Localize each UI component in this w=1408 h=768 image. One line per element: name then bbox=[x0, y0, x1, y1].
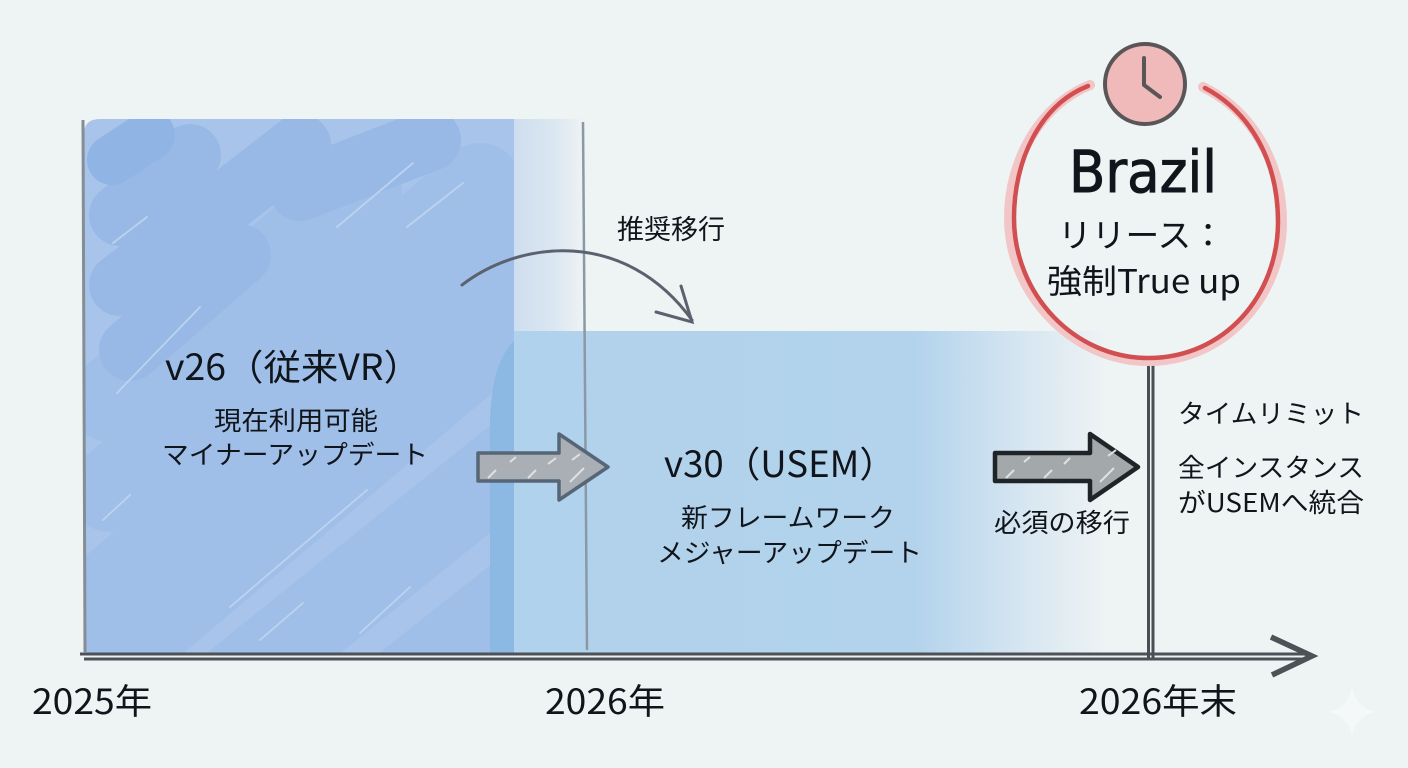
timeline axis arrow bbox=[80, 637, 1312, 675]
v30 description: メジャーアップデート bbox=[657, 533, 922, 570]
time limit note: タイムリミット bbox=[1178, 394, 1364, 431]
Brazil release ring bbox=[1009, 85, 1282, 361]
panel: v30 block bbox=[490, 331, 1105, 655]
axis label: 2026: 2026年 bbox=[545, 674, 665, 725]
v30 description bbox=[657, 498, 922, 570]
v30 title: v30（USEM） bbox=[664, 436, 896, 488]
v26 description: 現在利用可能 bbox=[214, 401, 378, 438]
v30 description: 新フレームワーク bbox=[681, 498, 895, 535]
Brazil description bbox=[1047, 209, 1241, 303]
icon: sparkle bbox=[1328, 687, 1376, 736]
panel: v26 block bbox=[84, 119, 584, 690]
Brazil description: リリース： bbox=[1058, 209, 1225, 257]
Brazil description: 強制True up bbox=[1047, 255, 1241, 303]
time limit note: 全インスタンス bbox=[1178, 448, 1364, 485]
v26 description: マイナーアップデート bbox=[162, 435, 428, 472]
block arrow: mandatory migration bbox=[995, 434, 1138, 500]
Brazil heading: Brazil bbox=[1069, 138, 1217, 206]
left boundary line bbox=[83, 120, 85, 652]
time limit note bbox=[1178, 394, 1364, 520]
label: recommended migration: 推奨移行 bbox=[617, 208, 725, 247]
label: mandatory migration: 必須の移行 bbox=[994, 503, 1130, 540]
2026 boundary line bbox=[583, 122, 587, 650]
axis label: end of 2026: 2026年末 bbox=[1079, 674, 1237, 725]
deadline vertical line bbox=[1148, 360, 1153, 658]
curved arrow: recommended migration bbox=[462, 251, 692, 322]
time limit note: がUSEMへ統合 bbox=[1178, 483, 1364, 520]
block arrow: v26 to v30 bbox=[478, 434, 608, 500]
icon: clock bbox=[1105, 44, 1185, 124]
axis label: 2025: 2025年 bbox=[32, 674, 152, 725]
v26 description bbox=[162, 401, 428, 472]
v26 title: v26（従来VR） bbox=[165, 339, 421, 391]
